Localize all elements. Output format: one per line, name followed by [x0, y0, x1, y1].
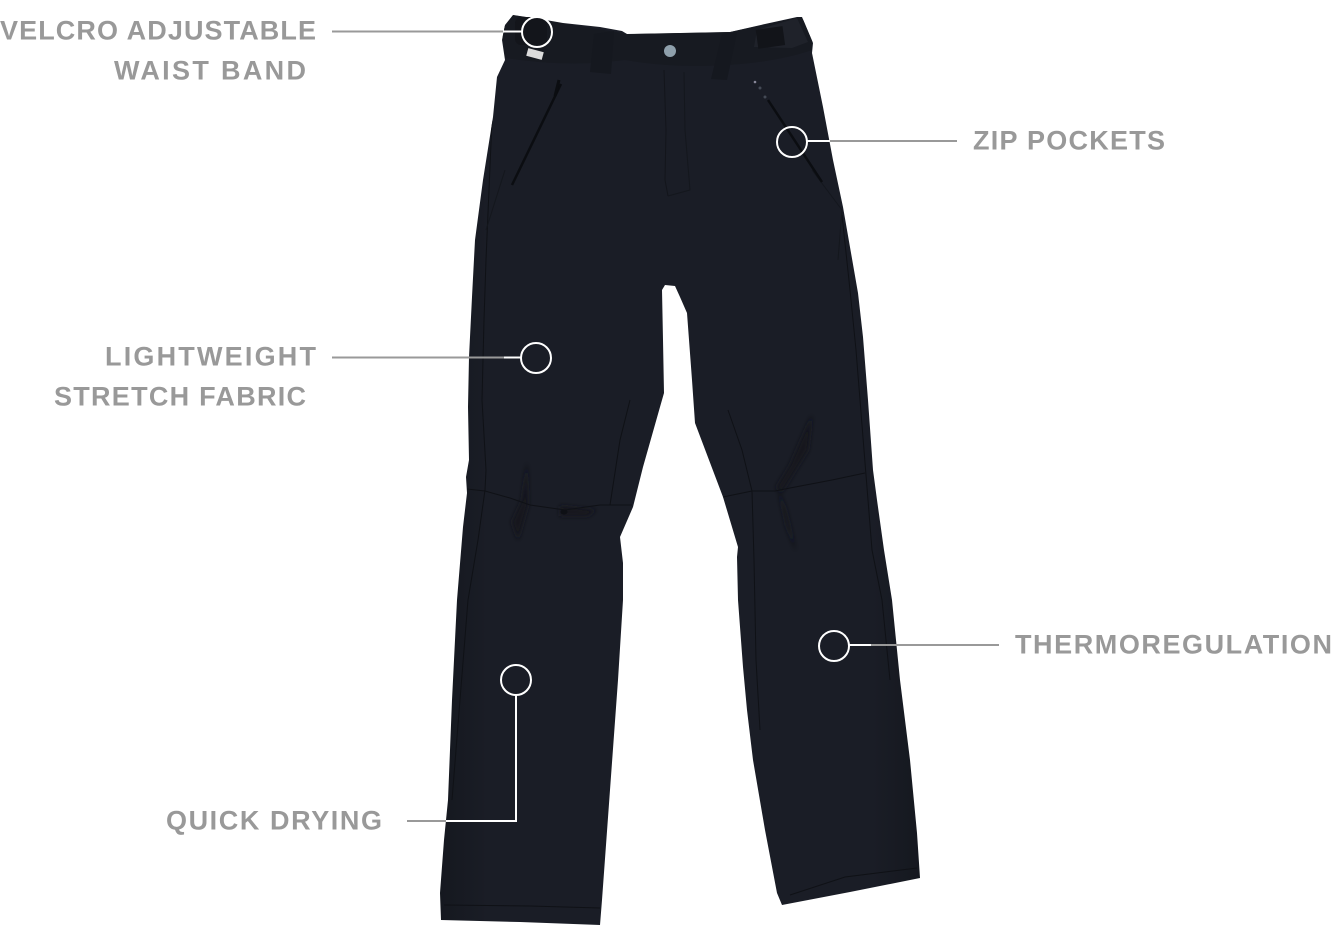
label: LIGHTWEIGHT: [105, 342, 316, 372]
callout: thermoregulation: [819, 630, 1332, 661]
label: THERMOREGULATION: [1015, 630, 1332, 660]
waist band shading: [502, 15, 812, 42]
callout: quick drying: [166, 665, 531, 836]
belt loops: [590, 31, 737, 80]
seams: [444, 70, 917, 908]
label: ZIP POCKETS: [973, 126, 1165, 156]
left tab: [515, 17, 547, 45]
trousers photo illustration: [440, 15, 920, 925]
label: WAIST BAND: [114, 56, 306, 86]
callout: velcro adjustable waist band: [0, 16, 552, 86]
velcro tab: [754, 18, 808, 48]
label: QUICK DRYING: [166, 806, 382, 836]
brand label: [526, 48, 544, 60]
label: [54, 342, 316, 412]
left zip pocket: [512, 80, 561, 185]
label: VELCRO ADJUSTABLE: [0, 16, 316, 46]
button: [664, 45, 676, 57]
callout: zip pockets: [777, 126, 1165, 157]
label: [0, 16, 316, 86]
callout: lightweight stretch fabric: [54, 342, 551, 412]
knee wrinkles: [514, 428, 808, 532]
velcro patch: [756, 26, 785, 49]
right zip pocket: [754, 81, 822, 182]
knee dart: [560, 510, 568, 514]
label: STRETCH FABRIC: [54, 382, 306, 412]
